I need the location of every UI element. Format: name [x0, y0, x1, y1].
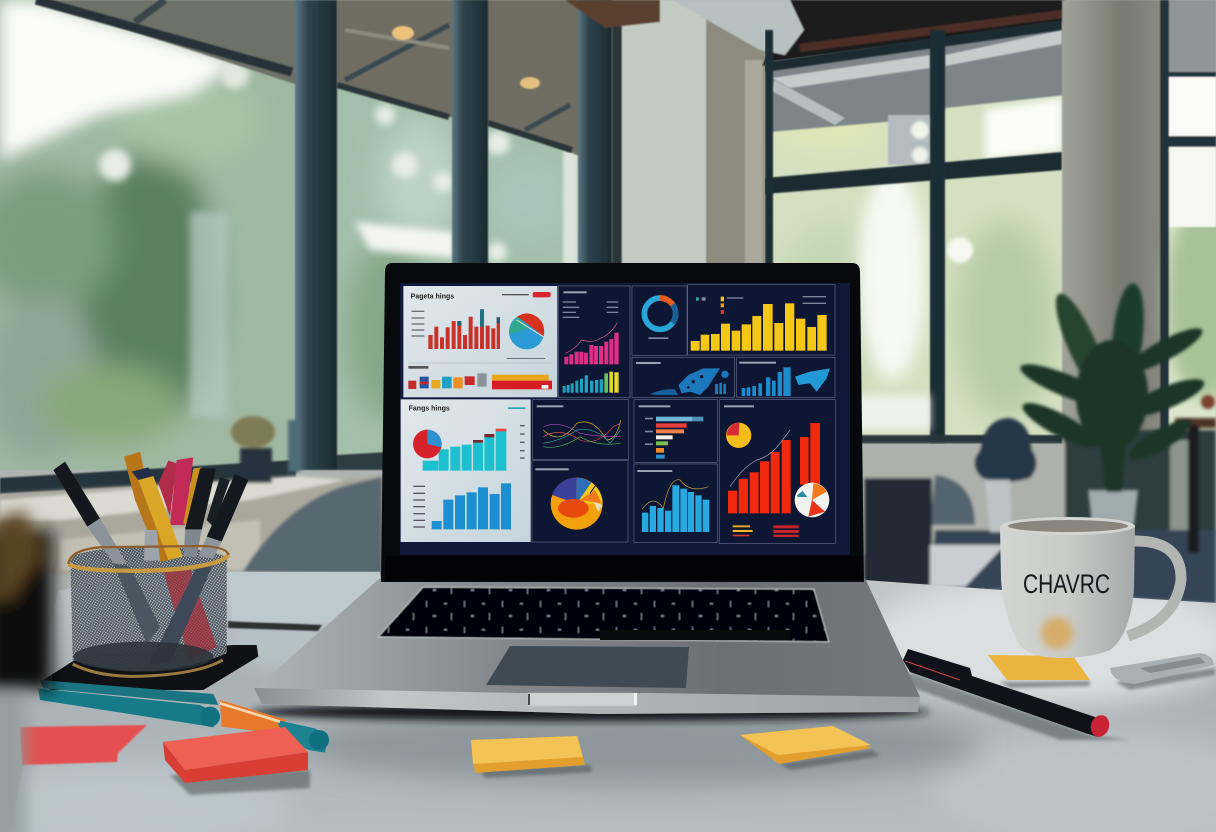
- laptop: [254, 263, 920, 714]
- bar chart: blue bars: [432, 483, 511, 529]
- bar chart: red: [728, 423, 820, 513]
- window sill: [0, 416, 382, 575]
- sunburst pie: [551, 478, 603, 530]
- panel: blue bars with line: [634, 464, 717, 543]
- blurred foreground object: [0, 510, 52, 832]
- sticky notes: yellow: [471, 655, 1090, 773]
- coffee mug: [1000, 517, 1181, 658]
- panel: horizontal bars: [634, 400, 717, 462]
- trackpad: [486, 646, 689, 688]
- window: middle panes: [337, 0, 580, 470]
- small legend blocks: [408, 366, 552, 389]
- window mullions: [295, 0, 612, 470]
- mug body: [1000, 526, 1135, 658]
- mug handle: [1128, 541, 1181, 636]
- chair behind laptop: [243, 477, 382, 575]
- panel: map right: [737, 357, 835, 397]
- window: right panes: [765, 20, 1065, 444]
- mug label: CHAVRC: [1023, 569, 1110, 599]
- teal pens lying: [38, 680, 220, 727]
- black marker on table: [903, 649, 1112, 739]
- pie chart: blue and red: [509, 313, 544, 349]
- mesh cup: [68, 546, 229, 676]
- panel: map left: [632, 357, 735, 397]
- donut chart: [644, 298, 676, 329]
- area bars: cyan: [423, 429, 506, 471]
- laptop screen lid: [381, 263, 864, 582]
- keyboard: [378, 587, 829, 642]
- bar chart: pink: [564, 333, 619, 364]
- panel: bottom light report: [401, 399, 531, 542]
- black tray: [43, 645, 258, 690]
- mesh back wall: [70, 547, 227, 573]
- sticky notes: red: [20, 725, 308, 783]
- panel: red bars: [719, 400, 835, 543]
- panel: pink bars: [559, 286, 630, 398]
- wall and ceiling: [565, 0, 1065, 265]
- pie chart: white with red: [795, 483, 829, 517]
- panel: donut: [632, 286, 687, 355]
- bar chart: teal and yellow: [563, 372, 619, 393]
- panel: top light report: [403, 286, 557, 397]
- pen holder and pens: [38, 452, 329, 753]
- notebook under laptop: [228, 572, 380, 631]
- panel: line chart: [533, 400, 629, 459]
- bar chart: red bars: [428, 309, 500, 349]
- concrete column and far window: [1062, 0, 1216, 530]
- pie chart: red and blue: [413, 430, 442, 458]
- table shadows: [170, 668, 1215, 795]
- laptop base: [254, 578, 920, 714]
- panel: yellow bars: [688, 285, 835, 355]
- pie chart: yellow: [726, 423, 751, 448]
- window: left pane lower frame: [0, 460, 296, 494]
- window: left pane with trees: [0, 0, 298, 470]
- lounge floor and furniture: [860, 395, 1216, 604]
- panel: pie multi-colour: [532, 461, 628, 542]
- line series: [543, 420, 621, 447]
- table top: [0, 560, 1216, 832]
- orange and teal pen: [220, 700, 329, 753]
- remote control: [1110, 653, 1214, 684]
- potted plant: [1016, 282, 1208, 525]
- dashboard screen: [401, 285, 835, 543]
- pens standing in holder: [53, 452, 248, 565]
- heading: bottom panel: Fangs hings: [409, 406, 450, 413]
- heading: top panel: Pageta hings: [411, 293, 454, 300]
